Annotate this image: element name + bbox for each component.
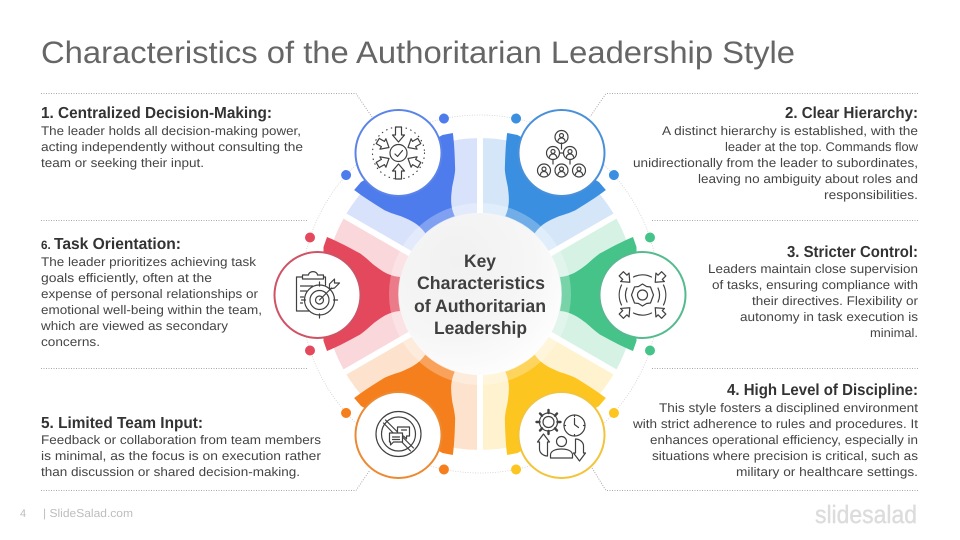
panel: limited team input text: is minimal, as the focus is on execution rather: [41, 449, 321, 463]
panel: clear hierarchy text: leaving no ambiguity about roles and: [698, 172, 918, 186]
panel: task orientation text: concerns.: [41, 335, 100, 349]
sector: yellow (discipline): [451, 318, 633, 483]
panel: stricter control text: [708, 244, 918, 340]
center label: [414, 251, 546, 338]
panel: high level of discipline text: [632, 382, 919, 479]
panel: stricter control text: Leaders maintain close supervision: [708, 262, 918, 276]
panel: task orientation text: 6. Task Orientation:: [41, 236, 181, 253]
panel: task orientation text: expense of personal relationships or: [41, 287, 258, 301]
footer site name: | SlideSalad.com: [43, 508, 133, 520]
panel: clear hierarchy text: responsibilities.: [824, 188, 918, 202]
center label: Characteristics: [417, 273, 545, 293]
icon: arrows converging on check: [356, 110, 442, 196]
panel: clear hierarchy text: A distinct hierarchy is established, with the: [662, 124, 918, 138]
panel: high level of discipline text: 4. High Level of Discipline:: [727, 382, 918, 399]
icon: no feedback speech bubbles: [356, 392, 442, 478]
panel: task orientation text: [40, 236, 262, 349]
panel: stricter control text: minimal.: [870, 326, 918, 340]
panel: high level of discipline text: with strict adherence to rules and procedures. It: [632, 417, 919, 431]
dotted leader lines: [41, 94, 918, 490]
panel: clear hierarchy text: unidirectionally from the leader to subordinates,: [633, 156, 918, 170]
panel: stricter control text: their directives. Flexibility or: [752, 294, 918, 308]
icon: gear with inward arrows: [600, 252, 686, 338]
panel: high level of discipline text: This style fosters a disciplined environment: [659, 401, 919, 415]
sector: dark blue (hierarchy): [451, 105, 633, 270]
logo wordmark: slidesalad: [815, 501, 917, 529]
panel: clear hierarchy text: 2. Clear Hierarchy:: [785, 105, 918, 122]
icon: gear, clock and person: [518, 392, 604, 478]
panel: stricter control text: autonomy in task execution is: [740, 310, 918, 324]
center label: Key: [464, 251, 496, 271]
panel: centralized decision-making text: acting independently without consulting the: [41, 140, 303, 154]
panel: limited team input text: 5. Limited Team Input:: [41, 415, 203, 432]
sector: red (task orientation): [274, 219, 408, 369]
panel: high level of discipline text: enhances operational efficiency, especially in: [650, 433, 918, 447]
icon: clipboard and target: [274, 252, 360, 338]
panel: centralized decision-making text: 1. Centralized Decision-Making:: [41, 105, 272, 122]
panel: limited team input text: [41, 415, 321, 479]
footer page number: 4: [20, 508, 26, 520]
panel: high level of discipline text: situations where precision is critical, such as: [652, 449, 918, 463]
panel: task orientation text: goals efficiently, often at the: [41, 271, 212, 285]
sector: orange (team input): [327, 318, 509, 483]
center label: of Authoritarian: [414, 296, 546, 316]
panel: clear hierarchy text: leader at the top. Commands flow: [725, 140, 919, 154]
panel: stricter control text: of tasks, ensuring compliance with: [712, 278, 918, 292]
panel: task orientation text: The leader prioritizes achieving task: [41, 255, 257, 269]
panel: limited team input text: than discussion or shared decision-making.: [41, 465, 300, 479]
panel: high level of discipline text: military or healthcare settings.: [736, 465, 918, 479]
sector: green (control): [552, 219, 686, 369]
panel: task orientation text: emotional well-being within the team,: [41, 303, 262, 317]
center hub: [394, 208, 566, 380]
panel: limited team input text: Feedback or collaboration from team members: [41, 433, 321, 447]
panel: stricter control text: 3. Stricter Control:: [787, 244, 918, 261]
panel: centralized decision-making text: The leader holds all decision-making power,: [41, 124, 301, 138]
panel: centralized decision-making text: [41, 105, 303, 170]
panel: centralized decision-making text: team or seeking their input.: [41, 156, 204, 170]
panel: task orientation text: which are viewed as secondary: [40, 319, 229, 333]
icon: people hierarchy: [518, 110, 604, 196]
title: Characteristics of the Authoritarian Leadership Style: [41, 35, 795, 70]
sector: blue (decision-making): [327, 105, 509, 270]
panel: clear hierarchy text: [633, 105, 919, 202]
center label: Leadership: [434, 318, 527, 338]
